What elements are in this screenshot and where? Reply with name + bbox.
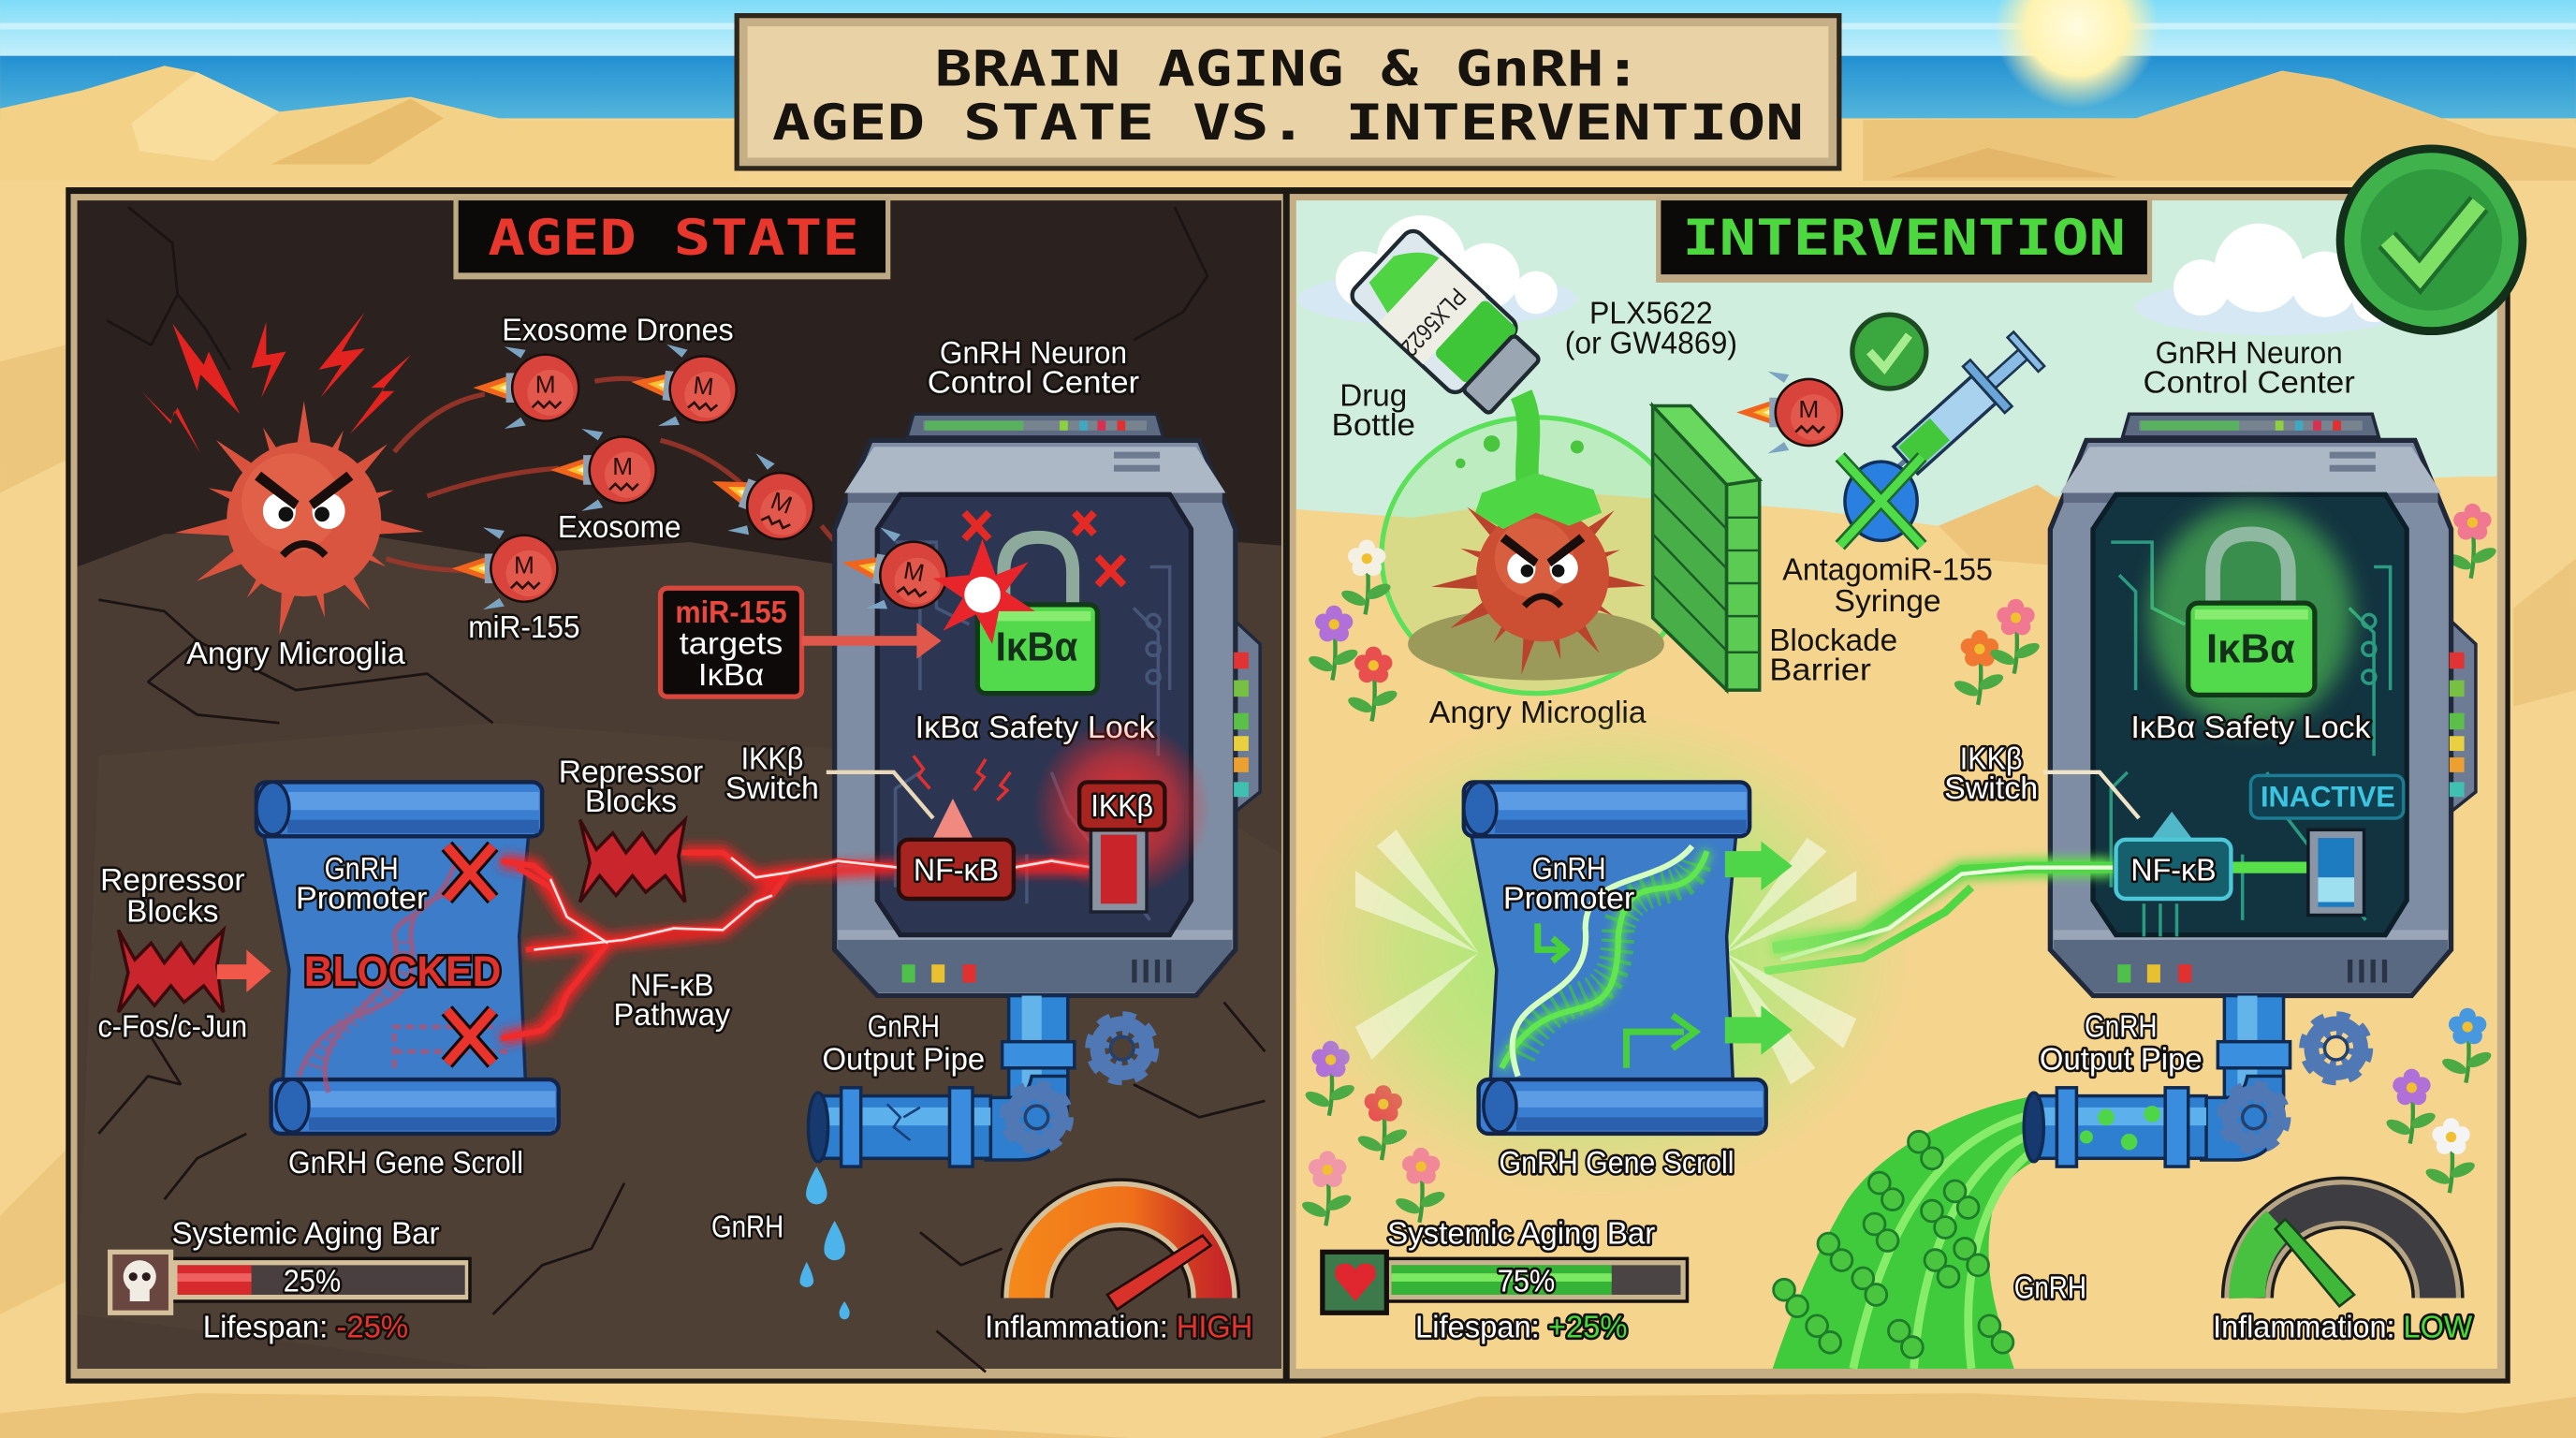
gauge: inflammation high: Inflammation: HIGH	[985, 1311, 1252, 1345]
output pipe: cracked	[809, 996, 1147, 1167]
icon: IkBa lock under attack: IκBα	[996, 624, 1077, 670]
icon: lightning bolts	[141, 312, 411, 453]
icon: impact burst	[933, 539, 1035, 644]
NF-kB box: active: NF-κB	[914, 854, 999, 888]
heading: aged state	[453, 198, 890, 279]
gene scroll: active: Promoter	[1503, 882, 1634, 917]
aging bar: 25%: Lifespan: -25%	[203, 1311, 408, 1345]
icon: blocked miRNA	[1840, 457, 1922, 546]
label: IKKb switch with leader: IKKβ	[1960, 741, 2022, 776]
badge: large check mark	[2336, 144, 2526, 335]
label: control center	[928, 336, 1139, 400]
label: control center: Control Center	[2143, 365, 2355, 400]
blockade barrier wall	[1653, 405, 1760, 690]
arrows: gene expression	[1725, 842, 1793, 1055]
label: control center: Control Center	[928, 365, 1139, 400]
aging bar: 75%: Systemic Aging Bar	[1387, 1217, 1655, 1252]
output pipe: flowing	[2024, 996, 2361, 1167]
label: IKKb switch with leader	[725, 741, 933, 818]
attacking drone	[835, 522, 955, 622]
aging bar: 25%: Systemic Aging Bar	[171, 1217, 440, 1252]
label: antagomiR-155 syringe: AntagomiR-155	[1782, 553, 1993, 588]
callout: miR-155 targets IkBa: targets	[680, 627, 783, 662]
label: control center: GnRH Neuron	[940, 336, 1127, 371]
label: control center	[2143, 336, 2355, 400]
label: output pipe: GnRH	[2085, 1009, 2157, 1044]
label: control center: GnRH Neuron	[2156, 336, 2343, 371]
label: miR-155: miR-155	[468, 610, 580, 645]
aging bar: 25%	[110, 1217, 470, 1345]
arrow: callout to lock	[802, 623, 942, 659]
badge: inactive: INACTIVE	[2261, 780, 2395, 814]
gene scroll: active	[1290, 707, 1914, 1199]
IKKb switch: off	[2308, 829, 2364, 916]
icon: angry microglia contained	[1430, 474, 1647, 676]
gene scroll: active: GnRH	[1532, 852, 1606, 887]
icon: IkBa lock intact	[2149, 505, 2352, 727]
ground cracks	[98, 207, 1265, 1372]
label: GnRH drops: GnRH	[711, 1211, 783, 1245]
label: GnRH flow: GnRH	[2014, 1270, 2086, 1305]
aging bar: 25%: 25%	[284, 1264, 341, 1299]
gauge: inflammation low: Inflammation: LOW	[2213, 1311, 2473, 1345]
icon: drug bottle: PLX5622	[1395, 283, 1471, 362]
main frame	[66, 187, 2510, 1384]
label: blockade barrier: Barrier	[1769, 653, 1871, 688]
repressor blocks with arrow: Repressor	[100, 863, 245, 898]
callout: miR-155 targets IkBa	[661, 588, 802, 697]
repressor blocks with arrow: c-Fos/c-Jun	[97, 1009, 247, 1044]
sparks	[914, 756, 1010, 800]
label: angry microglia: Angry Microglia	[1429, 696, 1647, 730]
GnRH green flow	[1773, 1096, 2034, 1369]
label: IKKb switch with leader: IKKβ	[741, 741, 803, 776]
NF-kB box: active	[899, 799, 1014, 899]
gene scroll: blocked: Promoter	[296, 882, 427, 917]
flowers	[1300, 504, 2498, 1225]
exosome drones: M	[514, 551, 534, 580]
gauge: inflammation high	[985, 1204, 1252, 1345]
icon: angry microglia	[173, 401, 425, 637]
label: exosome drones: Exosome Drones	[502, 313, 734, 347]
clouds	[1298, 215, 2415, 335]
exosome drones: M	[768, 486, 796, 520]
heading: intervention	[1656, 198, 2152, 283]
heading: aged state: AGED STATE	[488, 210, 859, 267]
aging bar: 75%: Lifespan: +25%	[1415, 1311, 1627, 1345]
NF-kB pathway lightning	[501, 853, 1092, 1038]
icon: antagomiR syringe	[1841, 326, 2050, 522]
aging bar: 75%	[1323, 1217, 1687, 1345]
icon: skull	[110, 1252, 171, 1313]
label: blockade barrier	[1769, 624, 1897, 688]
label: gene scroll: GnRH Gene Scroll	[1500, 1146, 1734, 1181]
label: gene scroll: GnRH Gene Scroll	[288, 1146, 523, 1181]
IKKb switch: active: IKKβ	[1090, 789, 1153, 824]
control center machine	[835, 414, 1260, 996]
drug stream and slime	[1456, 394, 1602, 529]
label: output pipe: Output Pipe	[822, 1043, 985, 1078]
exosome drones: M	[612, 452, 633, 480]
attacking drone: M	[901, 556, 927, 587]
label: NF-kB pathway: Pathway	[614, 998, 730, 1033]
label: drug bottle: Drug	[1339, 378, 1407, 413]
aging bar: 75%: 75%	[1498, 1264, 1555, 1299]
panel: intervention	[1290, 194, 2505, 1378]
blocked drone	[1736, 372, 1843, 453]
label: output pipe: Output Pipe	[2040, 1043, 2203, 1078]
exosome drones	[452, 341, 827, 609]
label: angry microglia: Angry Microglia	[186, 637, 405, 671]
label: IKKb switch with leader: Switch	[1944, 771, 2038, 806]
panel: aged state	[71, 194, 1283, 1378]
NF-kB pathway: green beam	[1764, 868, 2313, 971]
label: safety lock: IκBα Safety Lock	[915, 711, 1155, 745]
label: output pipe	[822, 1009, 985, 1078]
title banner: BRAIN AGING & GnRH:	[935, 40, 1641, 97]
repressor blocks with arrow: Blocks	[126, 895, 218, 930]
control center machine	[2050, 414, 2476, 996]
label: PLX5622	[1565, 297, 1737, 360]
callout: miR-155 targets IkBa: miR-155	[675, 595, 787, 630]
label: exosome: Exosome	[558, 510, 681, 545]
icon: GnRH drops	[799, 1167, 850, 1319]
repressor blocks with arrow	[97, 863, 271, 1044]
heading: intervention: INTERVENTION	[1682, 210, 2126, 267]
label: IKKb switch with leader	[1944, 741, 2139, 818]
gene scroll: blocked	[256, 782, 559, 1134]
gene scroll: blocked: GnRH	[325, 852, 399, 887]
label: drug bottle: Bottle	[1332, 408, 1415, 443]
label: output pipe: GnRH	[868, 1009, 940, 1044]
label: PLX5622: PLX5622	[1589, 297, 1713, 331]
drone trails	[386, 378, 862, 570]
label: safety lock: IκBα Safety Lock	[2130, 711, 2371, 745]
label: drug bottle	[1332, 378, 1415, 443]
icon: heart	[1323, 1252, 1386, 1313]
exosome drones: M	[692, 371, 715, 401]
small check badge	[1850, 312, 1928, 391]
containment dome	[1382, 418, 1690, 694]
gene scroll: blocked: BLOCKED	[304, 947, 501, 995]
label: antagomiR-155 syringe	[1782, 553, 1993, 619]
title banner	[735, 13, 1841, 171]
second repressor blocks: Repressor	[559, 755, 703, 789]
icon: IkBa lock under attack	[977, 537, 1097, 694]
icon: drug bottle	[1346, 227, 1547, 423]
red X marks	[964, 513, 1123, 585]
second repressor blocks: Blocks	[585, 785, 677, 819]
NF-kB box: idle	[2116, 812, 2231, 899]
label: IKKb switch with leader: Switch	[725, 771, 819, 806]
exosome drones: M	[535, 370, 556, 398]
NF-kB box: idle: NF-κB	[2130, 854, 2217, 888]
label: PLX5622: (or GW4869)	[1565, 326, 1737, 360]
blocked drone: M	[1798, 395, 1819, 423]
label: NF-kB pathway	[614, 969, 730, 1033]
label: output pipe	[2040, 1009, 2203, 1078]
callout: miR-155 targets IkBa: IκBα	[698, 658, 764, 693]
label: NF-kB pathway: NF-κB	[630, 969, 714, 1004]
IKKb switch: active	[1033, 720, 1211, 912]
second repressor blocks	[559, 755, 703, 902]
label: antagomiR-155 syringe: Syringe	[1835, 584, 1941, 619]
title banner: AGED STATE VS. INTERVENTION	[772, 95, 1804, 152]
label: blockade barrier: Blockade	[1769, 624, 1897, 658]
gauge: inflammation low	[2213, 1203, 2473, 1345]
icon: IkBa lock intact: IκBα	[2206, 625, 2295, 671]
